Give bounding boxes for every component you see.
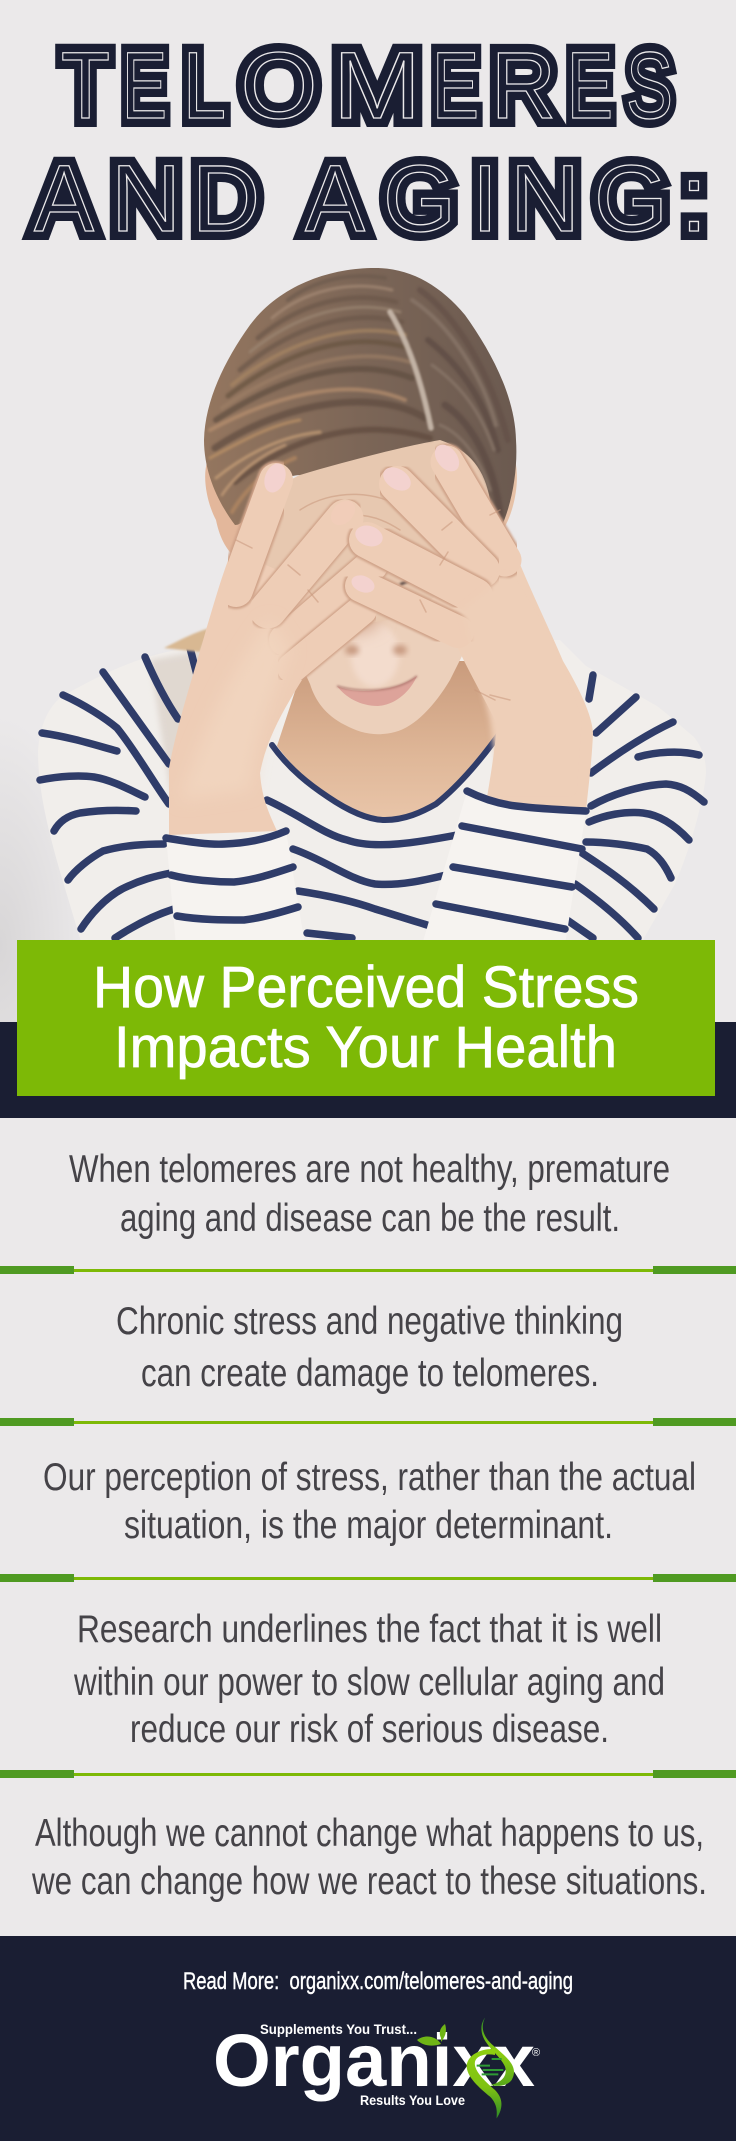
text block 4	[73, 1608, 665, 1751]
title: G	[383, 146, 456, 252]
title: E	[122, 33, 167, 139]
wall cover below sleeves	[0, 1118, 736, 1936]
right cuff	[422, 791, 586, 945]
logo: Organixx: Organixx	[213, 2019, 535, 2102]
title: I	[472, 146, 498, 252]
right hand	[361, 462, 593, 811]
title: S	[626, 33, 673, 139]
title: D	[192, 146, 260, 252]
title: E	[432, 33, 479, 139]
left hand	[169, 480, 372, 835]
title: T	[61, 33, 110, 139]
eye shadow	[400, 580, 432, 590]
title: M	[333, 33, 421, 139]
panel: heading banner: Impacts Your Health	[114, 1015, 617, 1080]
title: E	[122, 33, 167, 139]
text block 2: Chronic stress and negative thinking	[116, 1300, 623, 1343]
nails	[260, 440, 464, 596]
text block 2: can create damage to telomeres.	[141, 1352, 599, 1395]
title: O	[240, 33, 318, 139]
title: R	[491, 33, 556, 139]
forehead wrinkles	[300, 490, 435, 530]
title: D	[192, 146, 260, 252]
title: :	[681, 146, 707, 252]
title: R	[491, 33, 556, 139]
title: E	[567, 33, 613, 139]
text block 3	[43, 1456, 696, 1547]
text block 2	[116, 1300, 623, 1395]
title: G	[594, 146, 668, 252]
title: A	[34, 146, 95, 252]
panel: footer	[0, 1936, 736, 2141]
title: N	[510, 146, 580, 252]
wall shading	[0, 640, 150, 1022]
logo: Organixx: Results You Love	[360, 2093, 465, 2108]
title: E	[432, 33, 479, 139]
title: N	[111, 146, 181, 252]
logo: Organixx: Supplements You Trust...	[260, 2022, 417, 2037]
hair parting	[390, 312, 431, 428]
panel: heading banner	[17, 940, 715, 1096]
forehead	[250, 425, 497, 625]
face lower	[285, 590, 475, 734]
text block 1: aging and disease can be the result.	[120, 1197, 620, 1240]
title: A	[305, 146, 366, 252]
sweater	[38, 640, 706, 945]
photo: stressed woman holding her head	[0, 268, 706, 1022]
read more link: Read More: organixx.com/telomeres-and-aging	[183, 1968, 573, 1995]
title: G	[383, 146, 456, 252]
title: L	[183, 33, 226, 139]
title: :	[681, 146, 707, 252]
title: N	[510, 146, 580, 252]
leaves	[417, 2024, 446, 2046]
text block 3: situation, is the major determinant.	[124, 1504, 613, 1547]
ponytail wisp	[164, 628, 210, 652]
text block 1	[69, 1148, 670, 1240]
title: A	[305, 146, 366, 252]
text block 4: reduce our risk of serious disease.	[130, 1708, 609, 1751]
title	[34, 33, 707, 252]
panel: heading banner: How Perceived Stress	[93, 955, 639, 1020]
navy band behind heading	[0, 1022, 736, 1118]
title: L	[183, 33, 226, 139]
hair	[164, 268, 516, 652]
title: A	[34, 146, 95, 252]
neck and chest	[277, 661, 504, 820]
neckline stripe	[272, 726, 505, 820]
title: E	[567, 33, 613, 139]
text block 5	[31, 1812, 707, 1903]
title: N	[111, 146, 181, 252]
logo: Organixx: ®	[532, 2047, 540, 2059]
title: G	[594, 146, 668, 252]
title: O	[240, 33, 318, 139]
title: I	[472, 146, 498, 252]
title: S	[626, 33, 673, 139]
left cuff	[166, 831, 305, 945]
title: T	[61, 33, 110, 139]
title: M	[333, 33, 421, 139]
ears	[205, 460, 517, 560]
DNA helix	[467, 2018, 514, 2118]
